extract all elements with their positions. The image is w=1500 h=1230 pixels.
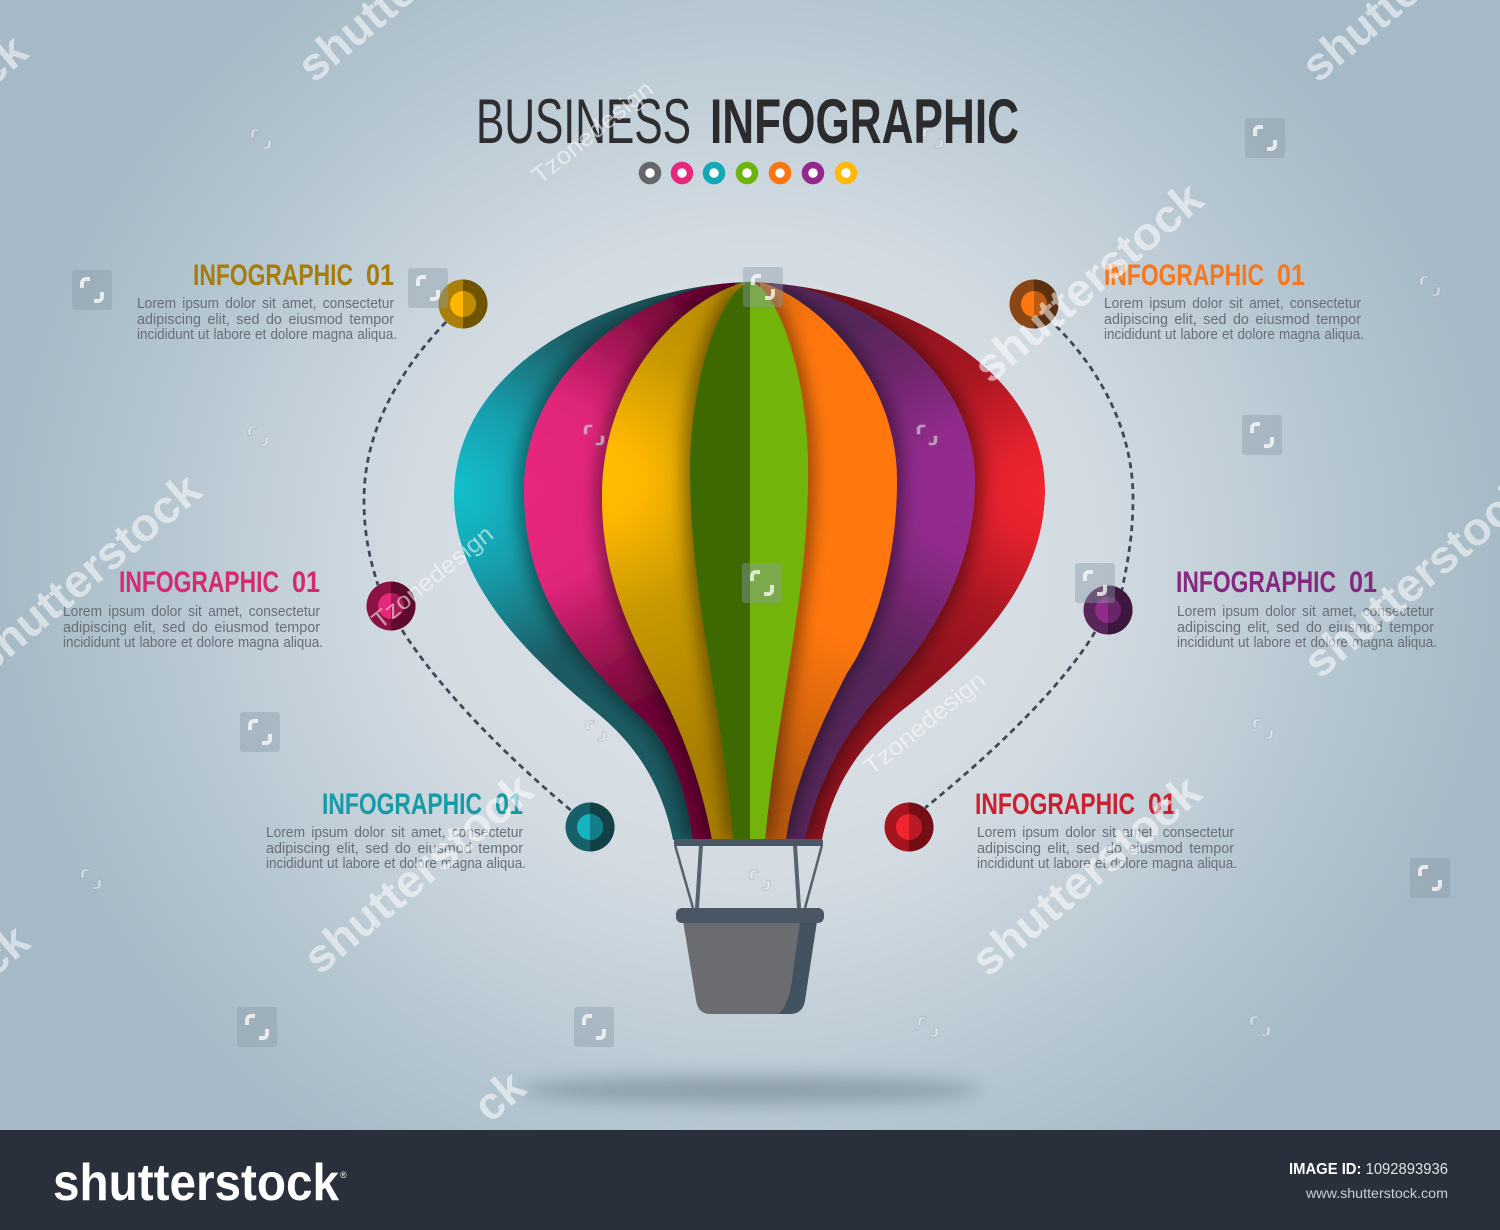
callout: middle left pink — [63, 566, 323, 651]
callout: middle right purple — [1176, 566, 1437, 651]
callout: bottom left teal: adipiscing elit, sed do eiusmod tempor — [266, 841, 523, 857]
callout: bottom right red: 01 — [1148, 788, 1176, 821]
callout: bottom left teal: Lorem ipsum dolor sit amet, consectetur — [266, 825, 523, 841]
title: BUSINESS — [476, 87, 691, 157]
hot air balloon envelope — [454, 282, 1045, 840]
callout: middle right purple: 01 — [1349, 566, 1377, 599]
marker: orange — [1010, 280, 1058, 328]
title: INFOGRAPHIC — [710, 87, 1019, 157]
callout: middle right purple: Lorem ipsum dolor sit amet, consectetur — [1177, 604, 1434, 620]
basket side shade — [778, 921, 817, 1014]
callout: middle right purple: INFOGRAPHIC — [1176, 566, 1336, 599]
panel: light green — [750, 282, 808, 840]
callout: top left gold: INFOGRAPHIC — [193, 259, 353, 292]
panel: purple — [750, 282, 975, 840]
callout: top right orange: incididunt ut labore et dolore magna aliqua. — [1104, 327, 1364, 343]
footer image id: IMAGE ID: 1092893936 — [1289, 1161, 1448, 1178]
callout: bottom right red: INFOGRAPHIC — [975, 788, 1135, 821]
callout: middle right purple: adipiscing elit, sed do eiusmod tempor — [1177, 620, 1434, 636]
callout: top left gold — [137, 259, 397, 343]
callout: bottom left teal: 01 — [495, 788, 523, 821]
callout: middle left pink: INFOGRAPHIC — [119, 566, 279, 599]
panel: red — [750, 282, 1045, 840]
top bar — [674, 839, 823, 846]
title — [476, 87, 1019, 157]
panel: yellow — [602, 282, 750, 840]
callout: top right orange — [1104, 259, 1364, 343]
panel: teal — [454, 282, 750, 840]
watermark icons — [72, 118, 1450, 1047]
title colour dots — [642, 165, 854, 181]
dashed connectors — [364, 322, 1133, 812]
ropes — [675, 845, 822, 908]
panel: dark green — [690, 282, 750, 840]
callout: top left gold: incididunt ut labore et dolore magna aliqua. — [137, 327, 397, 343]
panel: orange — [750, 282, 897, 840]
callout: bottom right red: incididunt ut labore et dolore magna aliqua. — [977, 856, 1237, 872]
marker: purple — [1084, 586, 1132, 634]
panel: pink — [524, 282, 750, 840]
callout: top left gold: Lorem ipsum dolor sit amet, consectetur — [137, 296, 394, 312]
callout: top left gold: adipiscing elit, sed do eiusmod tempor — [137, 312, 394, 328]
watermark text: ck — [463, 1059, 535, 1132]
callout: bottom left teal — [266, 788, 526, 872]
footer registered mark: ® — [340, 1170, 347, 1180]
watermark text: shutterstock — [293, 762, 543, 984]
basket rim — [676, 908, 824, 923]
callout: middle left pink: adipiscing elit, sed do eiusmod tempor — [63, 620, 320, 636]
watermark text: shutterstock — [963, 171, 1213, 393]
marker: pink — [366, 582, 416, 630]
marker: gold — [438, 280, 488, 328]
callout: bottom right red: Lorem ipsum dolor sit amet, consectetur — [977, 825, 1234, 841]
callout: top left gold: 01 — [366, 259, 394, 292]
watermark text: Tzonedesign — [367, 521, 499, 635]
panel: light green shadow layer — [750, 282, 808, 840]
callout: bottom left teal: incididunt ut labore et dolore magna aliqua. — [266, 856, 526, 872]
ground shadow — [518, 1076, 982, 1104]
basket body — [683, 921, 817, 1014]
marker: teal — [566, 802, 614, 852]
watermark text: shutterstock — [961, 764, 1211, 986]
footer logo: shutterstock — [53, 1154, 339, 1212]
callout: middle left pink: 01 — [292, 566, 320, 599]
callout: top right orange: 01 — [1277, 259, 1305, 292]
footer url: www.shutterstock.com — [1305, 1185, 1448, 1201]
watermark text: Tzonedesign — [527, 76, 659, 190]
marker: red — [884, 802, 934, 852]
footer bar — [0, 1130, 1500, 1230]
callout: middle left pink: Lorem ipsum dolor sit amet, consectetur — [63, 604, 320, 620]
callout: middle right purple: incididunt ut labore et dolore magna aliqua. — [1177, 635, 1437, 651]
callout: bottom right red — [975, 788, 1237, 872]
callout: top right orange: Lorem ipsum dolor sit amet, consectetur — [1104, 296, 1361, 312]
callout: top right orange: adipiscing elit, sed do eiusmod tempor — [1104, 312, 1361, 328]
callout: bottom right red: adipiscing elit, sed do eiusmod tempor — [977, 841, 1234, 857]
watermark text: Tzonedesign — [859, 667, 991, 781]
callout: bottom left teal: INFOGRAPHIC — [322, 788, 482, 821]
callout: middle left pink: incididunt ut labore et dolore magna aliqua. — [63, 635, 323, 651]
balloon basket — [674, 839, 824, 1014]
callout: top right orange: INFOGRAPHIC — [1104, 259, 1264, 292]
